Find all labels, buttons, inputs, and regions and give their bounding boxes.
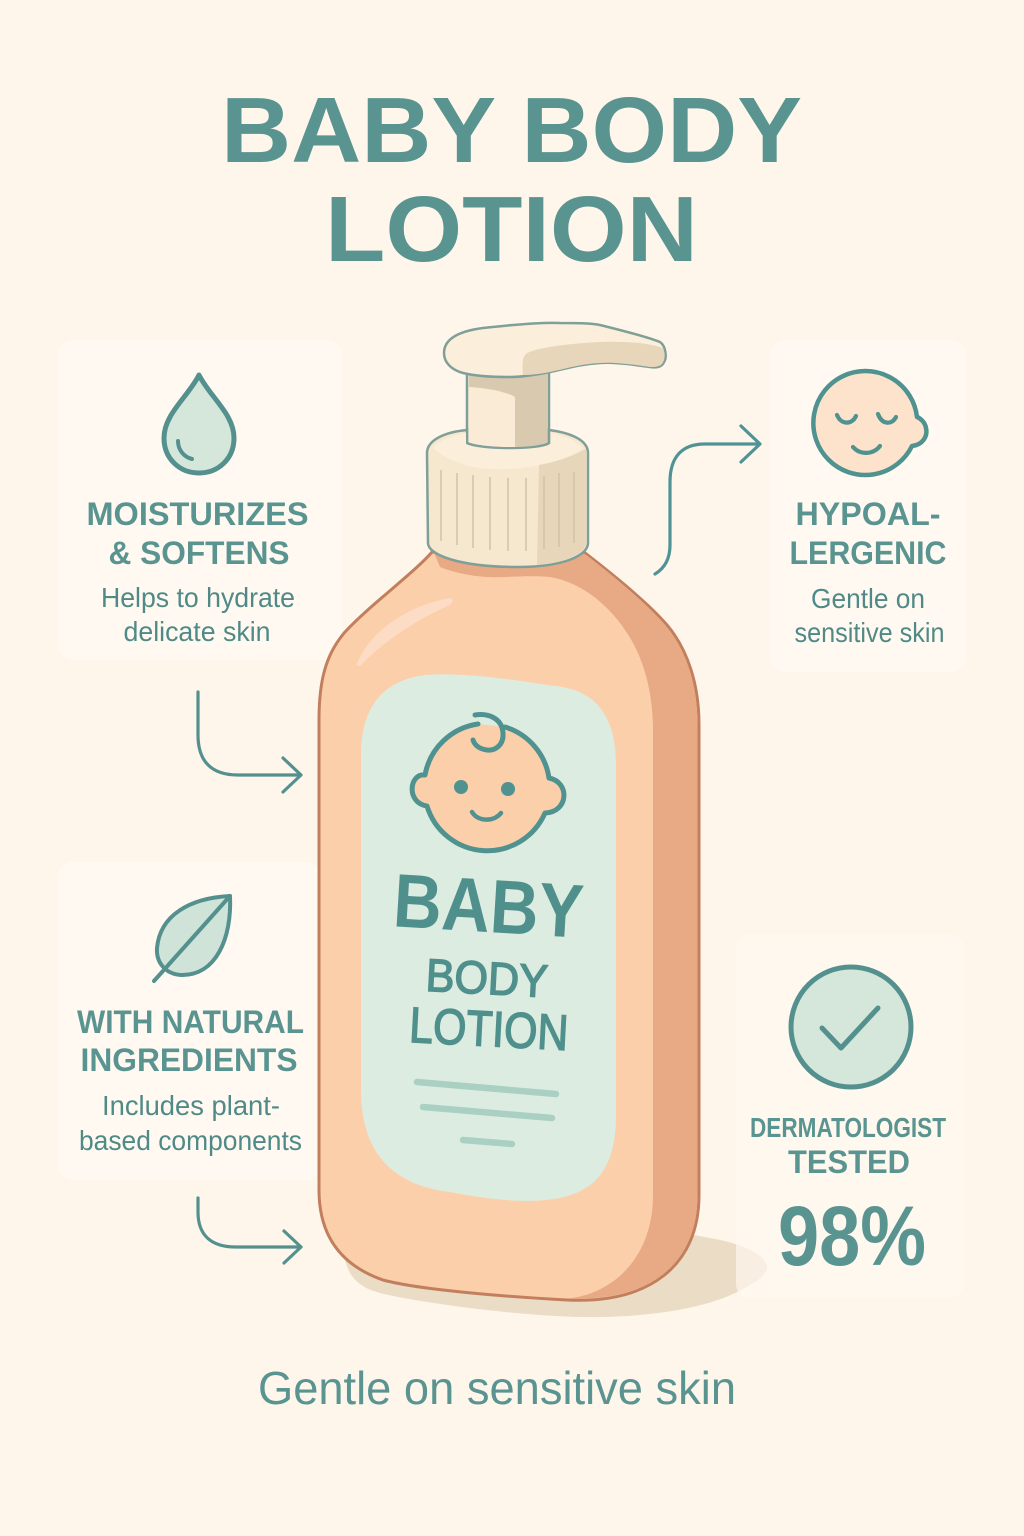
bottle body bbox=[319, 552, 699, 1300]
title: LOTION bbox=[325, 177, 698, 281]
label lines bbox=[417, 1082, 556, 1144]
label text: BABY bbox=[391, 858, 586, 955]
panel: dermatologist tested bbox=[736, 934, 964, 1298]
panel: moisturizes bbox=[58, 340, 342, 660]
arrow: moisturizes to bottle bbox=[198, 692, 301, 792]
text: hypoallergenic description bbox=[794, 583, 944, 648]
panel: natural ingredients bbox=[58, 862, 320, 1180]
text: moisturizes description bbox=[101, 582, 295, 647]
text: hypoallergenic description: sensitive skin bbox=[794, 617, 944, 648]
heading: hypoallergenic bbox=[790, 496, 946, 571]
label text bbox=[391, 858, 586, 1061]
text: moisturizes description: delicate skin bbox=[124, 616, 270, 647]
panel: hypoallergenic bbox=[770, 340, 966, 672]
heading: moisturizes bbox=[86, 496, 308, 571]
text: natural ingredients description: based components bbox=[79, 1125, 302, 1156]
label bbox=[361, 674, 616, 1201]
icon: water drop bbox=[164, 375, 234, 473]
icon: baby face bbox=[813, 371, 926, 475]
bottle bbox=[319, 323, 699, 1300]
heading: dermatologist tested bbox=[750, 1112, 946, 1180]
arrow: bottle to hypoallergenic bbox=[655, 426, 760, 574]
pump cap bbox=[427, 430, 588, 567]
heading: hypoallergenic: LERGENIC bbox=[790, 535, 946, 571]
heading: hypoallergenic: HYPOAL- bbox=[796, 496, 940, 532]
heading: natural ingredients: WITH NATURAL bbox=[77, 1004, 304, 1040]
text: natural ingredients description bbox=[79, 1090, 302, 1156]
bottle highlight bbox=[357, 598, 453, 666]
pump head bbox=[444, 323, 666, 449]
heading: moisturizes: & SOFTENS bbox=[108, 535, 290, 571]
title bbox=[221, 78, 802, 281]
heading: natural ingredients: INGREDIENTS bbox=[80, 1042, 298, 1078]
icon: baby face on label bbox=[412, 715, 564, 851]
bottle side shade bbox=[434, 553, 698, 1299]
heading: moisturizes: MOISTURIZES bbox=[86, 496, 308, 532]
tagline: Gentle on sensitive skin bbox=[258, 1362, 736, 1414]
heading: dermatologist tested: DERMATOLOGIST bbox=[750, 1112, 946, 1143]
text: natural ingredients description: Includes plant- bbox=[102, 1090, 280, 1121]
bottle shadow bbox=[345, 1235, 767, 1317]
label text: LOTION bbox=[408, 997, 570, 1061]
text: moisturizes description: Helps to hydrate bbox=[101, 582, 295, 613]
arrow: natural ingredients to bottle bbox=[198, 1198, 301, 1263]
title: BABY BODY bbox=[221, 78, 802, 182]
icon: leaf bbox=[154, 896, 230, 981]
dermatologist tested content bbox=[750, 967, 946, 1283]
heading: dermatologist tested: TESTED bbox=[788, 1144, 910, 1180]
icon: check badge bbox=[791, 967, 911, 1087]
label text: BODY bbox=[425, 949, 549, 1007]
text: hypoallergenic description: Gentle on bbox=[811, 583, 925, 614]
heading: natural ingredients bbox=[77, 1004, 304, 1078]
stat: 98%: 98% bbox=[778, 1189, 926, 1283]
